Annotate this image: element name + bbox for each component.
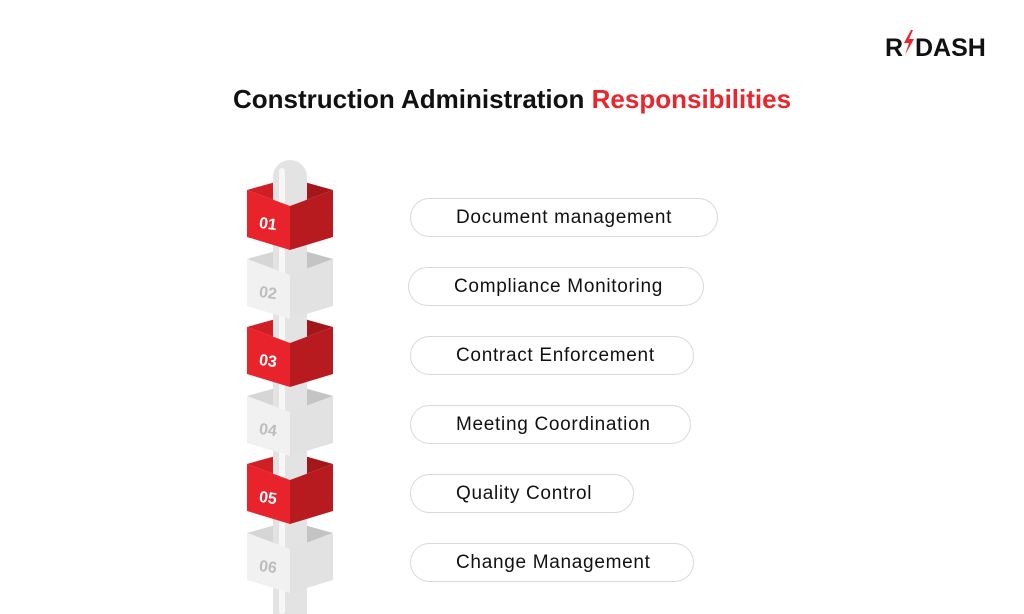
logo: R <box>885 34 903 62</box>
pill: Contract Enforcement: Contract Enforcement <box>456 345 655 366</box>
logo <box>885 30 986 62</box>
block 05: 05 <box>258 489 278 508</box>
inner back walls <box>247 178 333 549</box>
block 06: 06 <box>258 558 278 577</box>
pill: Document management <box>410 198 718 237</box>
title: Construction Administration Responsibilities <box>233 84 791 114</box>
pill: Change Management <box>410 543 694 582</box>
pill: Contract Enforcement <box>410 336 694 375</box>
pill: Meeting Coordination: Meeting Coordination <box>456 414 651 435</box>
block 05 <box>247 464 333 524</box>
pill: Quality Control <box>410 474 634 513</box>
block 02 <box>247 259 333 319</box>
block 01 <box>247 190 333 250</box>
logo: DASH <box>915 34 986 62</box>
block 06 <box>247 533 333 593</box>
block 03: 03 <box>258 352 278 371</box>
block 04 <box>247 396 333 456</box>
pill: Document management: Document management <box>456 207 672 228</box>
pole <box>273 160 307 614</box>
block 01: 01 <box>258 215 278 234</box>
block 04: 04 <box>258 421 278 440</box>
pill: Meeting Coordination <box>410 405 691 444</box>
block 02: 02 <box>258 284 278 303</box>
pill: Compliance Monitoring <box>408 267 704 306</box>
block 03 <box>247 327 333 387</box>
pill: Change Management: Change Management <box>456 552 651 573</box>
pill: Compliance Monitoring: Compliance Monitoring <box>454 276 663 297</box>
pill: Quality Control: Quality Control <box>456 483 592 504</box>
